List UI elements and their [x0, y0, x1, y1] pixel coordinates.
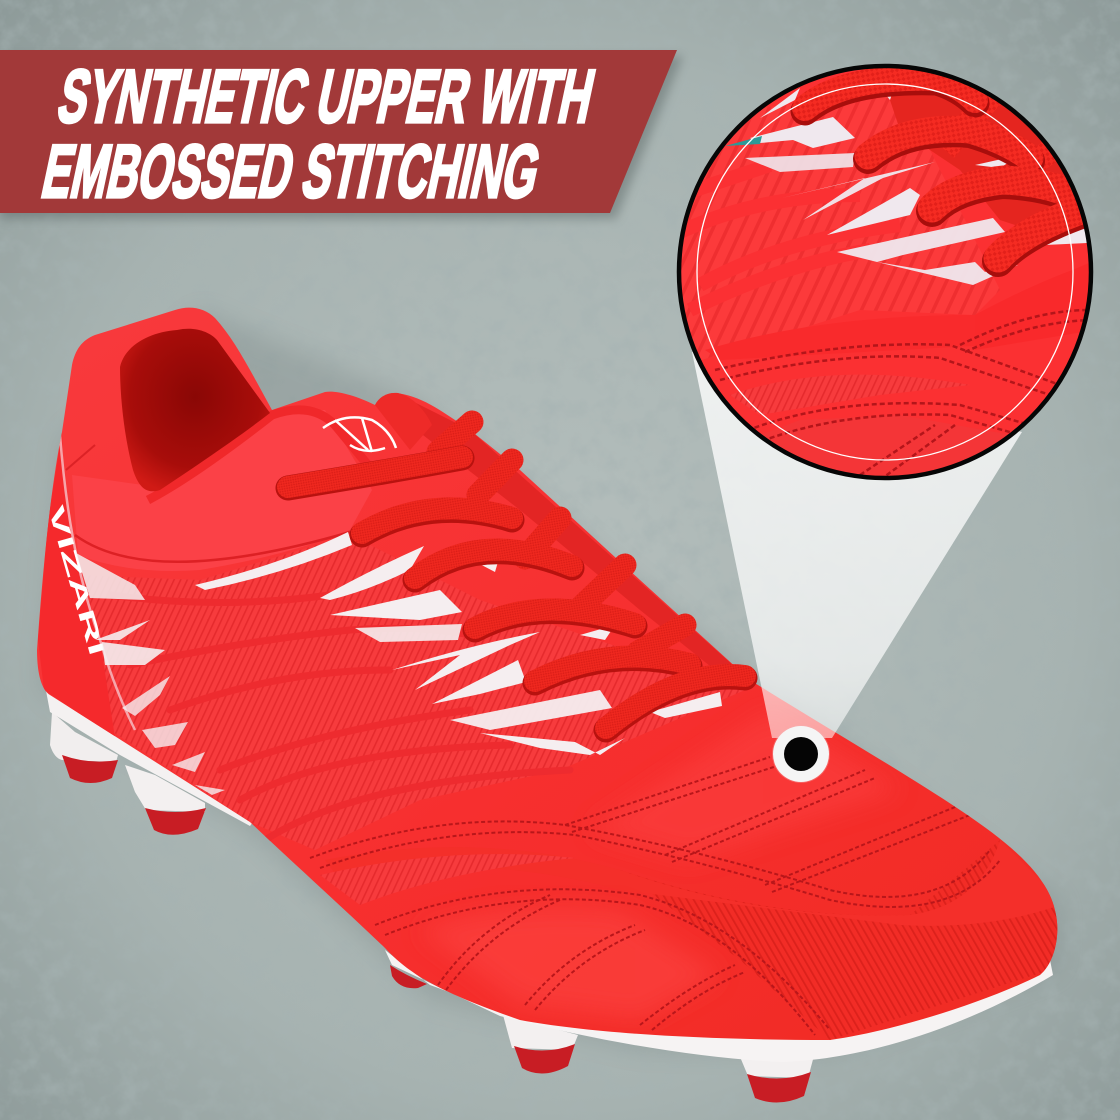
white outsole	[44, 680, 1053, 1062]
ground shadow around shoe	[40, 310, 1060, 1055]
lens: stitching	[715, 310, 1090, 480]
heading line 2: EMBOSSED STITCHING	[35, 130, 547, 214]
pointer dot	[772, 725, 830, 783]
lace top segments	[288, 457, 745, 728]
lens: outer black ring	[679, 66, 1091, 478]
heel counter strip	[38, 432, 115, 738]
lens: raised bands	[680, 165, 900, 310]
lens: inner white ring	[697, 84, 1073, 460]
rear studs	[50, 712, 206, 835]
lens: lace shadows	[805, 81, 1095, 261]
upper body	[37, 308, 1057, 1040]
brand text on heel: VIZARI	[43, 502, 110, 658]
front studs	[390, 965, 815, 1103]
raised bands on midfoot	[110, 595, 570, 840]
heel tab seam	[66, 445, 95, 470]
lace throat shadow	[417, 404, 732, 666]
lens: teal accent	[725, 136, 762, 146]
forefoot leather highlights	[618, 723, 876, 853]
lens: white shards	[745, 85, 1087, 285]
embossed stitching	[310, 757, 1000, 1035]
heel collar panel shading	[72, 410, 372, 571]
midfoot lower ribbed patch	[320, 854, 575, 905]
heading line 1: SYNTHETIC UPPER WITH	[51, 55, 601, 139]
magnified detail circle	[670, 55, 1100, 490]
inner collar lining	[120, 329, 270, 491]
collar rim band	[148, 410, 372, 500]
lace crossing segments	[438, 422, 685, 652]
shoe	[37, 308, 1062, 1103]
lens: background lace straps	[943, 96, 1056, 169]
white graphic shards	[76, 532, 722, 795]
banner shape	[0, 50, 683, 219]
lace shadows	[288, 458, 745, 730]
lens: ribbed panel	[670, 90, 1000, 370]
spotlight beam	[692, 352, 1022, 738]
lens: lace tops	[805, 78, 1095, 258]
lens: lace throat underlay	[890, 95, 1064, 225]
lens: lower panels	[730, 375, 970, 415]
toe ribbed band	[620, 840, 1062, 1040]
title banner	[0, 50, 683, 219]
tongue top	[375, 393, 432, 450]
logo mark	[323, 417, 396, 452]
laces	[288, 422, 745, 730]
ribbed midfoot panel	[75, 535, 745, 850]
lens: laces	[805, 78, 1095, 261]
